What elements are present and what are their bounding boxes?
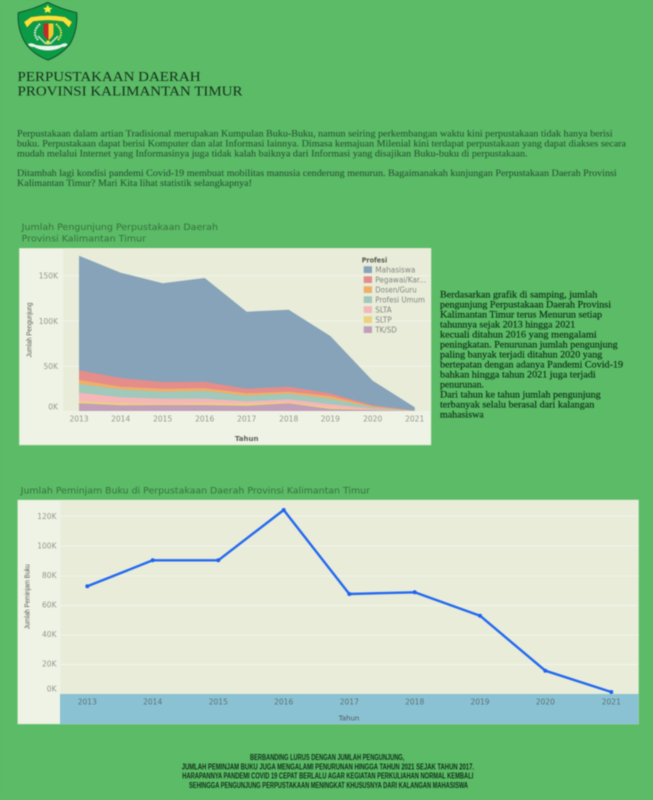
title: PROVINSI KALIMANTAN TIMUR (18, 84, 243, 100)
x axis labels: 2015 (209, 698, 228, 706)
intro text block: Kalimantan Timur? Mari Kita lihat statistik selangkapnya! (17, 178, 252, 189)
heading: borrowers chart: Jumlah Peminjam Buku di Perpustakaan Daerah Provinsi Kalimantan Timur (20, 486, 370, 496)
x axis labels: 2017 (237, 414, 256, 424)
x axis labels: 2015 (153, 414, 172, 424)
side commentary text: Kalimantan Timur terus Menurun setiap (440, 310, 602, 320)
y axis title: Jumlah Pengunjung (24, 302, 34, 358)
x axis labels: 2020 (536, 698, 555, 706)
panel: borrowers line chart (18, 500, 638, 724)
x axis labels (69, 414, 424, 424)
y axis labels: 100K (37, 541, 58, 550)
legend: SLTP (375, 315, 392, 324)
side commentary text: bertepatan dengan adanya Pandemi Covid-19 (440, 360, 623, 370)
closing statement text (182, 753, 474, 790)
side commentary text: Dari tahun ke tahun jumlah pengunjung (440, 390, 601, 400)
title: PERPUSTAKAAN DAERAH (18, 70, 200, 85)
side commentary text: paling banyak terjadi ditahun 2020 yang (440, 350, 602, 360)
side commentary text: peningkatan. Penurunan jumlah pengunjung (440, 340, 618, 350)
heading: visitors chart: Provinsi Kalimantan Timur (22, 235, 146, 245)
x axis labels: 2014 (143, 698, 162, 706)
legend: Pegawai/Kar... (375, 275, 426, 284)
legend: Profesi Umum (375, 295, 425, 304)
intro text block (17, 128, 627, 189)
x axis labels (78, 698, 621, 706)
side commentary text: tahunnya sejak 2013 hingga 2021 (440, 320, 575, 330)
x axis labels: 2013 (78, 698, 97, 706)
heading: visitors chart (21, 223, 218, 245)
x axis labels: 2019 (470, 698, 490, 706)
y axis labels: 20K (42, 660, 58, 669)
side commentary text: mahasiswa (440, 410, 484, 420)
y axis labels: 50K (44, 362, 59, 371)
y axis labels: 40K (42, 630, 58, 639)
intro text block: mudah melalui Internet yang Informasinya juga tidak kalah baiknya dari Informasi yang disajikan Buku-buku di perpustakaan. (17, 148, 528, 159)
y axis labels: 0K (48, 402, 59, 412)
x axis labels: 2014 (111, 414, 130, 424)
intro text block: Ditambah lagi kondisi pandemi Covid-19 membuat mobilitas manusia cenderung menurun. Bagaimanakah kunjungan Perpustakaan Daerah Provinsi (17, 168, 617, 179)
legend: Dosen/Guru (375, 285, 417, 294)
side commentary text: kecuali ditahun 2016 yang mengalami (440, 330, 597, 340)
data line (85, 508, 613, 694)
stacked areas (79, 256, 415, 411)
x axis labels: 2017 (340, 698, 359, 706)
y axis labels: 100K (39, 317, 59, 326)
x axis labels: 2013 (69, 414, 89, 424)
x axis labels: 2021 (405, 414, 424, 424)
y axis labels (39, 272, 59, 412)
side commentary text: bahkan hingga tahun 2021 juga terjadi (440, 370, 596, 380)
y axis labels: 150K (39, 272, 59, 280)
intro text block: Perpustakaan dalam artian Tradisional merupakan Kumpulan Buku-Buku, namun seiring perkembangan waktu kini perpustakaan tidak hanya berisi (17, 128, 613, 139)
legend: SLTA (375, 305, 393, 314)
x axis labels: 2020 (363, 414, 382, 424)
panel: visitors stacked area chart (19, 248, 431, 445)
closing statement text: BERBANDING LURUS DENGAN JUMLAH PENGUNJUNG, (250, 753, 404, 762)
x axis title: Tahun (338, 714, 359, 722)
legend: Profesi (362, 256, 387, 264)
closing statement text: SEHINGGA PENGUNJUNG PERPUSTAKAAN MENINGKAT KHUSUSNYA DARI KALANGAN MAHASISWA (189, 781, 468, 790)
y axis title: Jumlah Peminjam Buku (22, 564, 32, 629)
heading: visitors chart: Jumlah Pengunjung Perpustakaan Daerah (21, 223, 218, 233)
x axis labels: 2016 (274, 698, 293, 706)
y axis labels: 120K (37, 512, 58, 521)
side commentary text: Berdasarkan grafik di samping, jumlah (440, 290, 597, 300)
side commentary text: terbanyak selalu berasal dari kalangan (440, 400, 594, 410)
intro text block: buku. Perpustakaan dapat berisi Komputer dan alat Informasi lainnya. Dimasa kemajuan Milenial kini terdapat perpustakaan yang dapat diakses secara (17, 138, 627, 149)
x axis labels: 2021 (602, 698, 621, 706)
title (18, 70, 243, 100)
x axis labels: 2019 (321, 414, 340, 424)
y axis labels: 60K (42, 601, 58, 610)
side commentary text: pengunjung Perpustakaan Daerah Provinsi (440, 300, 611, 310)
side commentary text (440, 290, 623, 420)
side commentary text: penurunan. (440, 380, 484, 390)
x axis labels: 2016 (195, 414, 214, 424)
legend (362, 256, 426, 334)
y axis labels: 0K (47, 684, 58, 694)
x axis labels: 2018 (405, 698, 424, 706)
x axis title: Tahun (235, 435, 258, 443)
x axis labels: 2018 (279, 414, 298, 424)
closing statement text: HARAPANNYA PANDEMI COVID 19 CEPAT BERLALU AGAR KEGIATAN PERKULIAHAN NORMAL KEMBALI (182, 772, 473, 781)
icon: provincial crest (18, 2, 77, 60)
y axis labels: 80K (42, 571, 58, 580)
closing statement text: JUMLAH PEMINJAM BUKU JUGA MENGALAMI PENURUNAN HINGGA TAHUN 2021 SEJAK TAHUN 2017. (182, 762, 474, 771)
y axis labels (37, 512, 58, 694)
legend: Mahasiswa (375, 265, 415, 274)
legend: TK/SD (374, 325, 397, 334)
